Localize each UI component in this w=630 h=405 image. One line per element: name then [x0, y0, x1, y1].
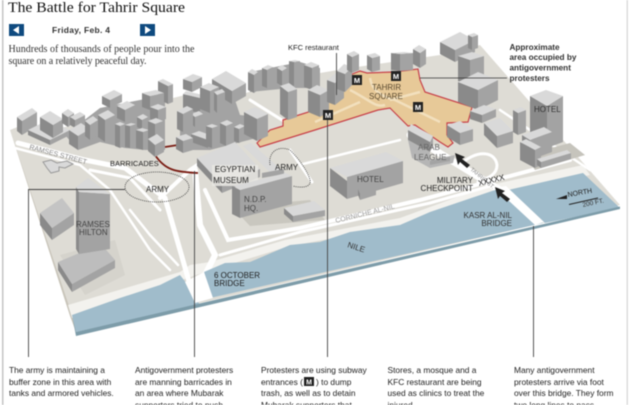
- Egyptian Museum: EGYPTIAN: [215, 165, 255, 174]
- intro text: Hundreds of thousands of people pour into the: [8, 44, 195, 55]
- hotel middle: [330, 152, 403, 200]
- subway markers: M: [415, 103, 421, 112]
- map labels: NILE: [346, 240, 366, 254]
- N.D.P. HQ: N.D.P.: [244, 195, 267, 204]
- caption 3: ) to dump: [316, 377, 352, 387]
- barricades line: [155, 145, 198, 173]
- map labels: CHECKPOINT: [421, 184, 473, 193]
- small block Ramses street: [43, 160, 73, 173]
- subway markers: M: [354, 76, 360, 85]
- ground: [10, 45, 620, 332]
- N.D.P. HQ: [232, 173, 325, 226]
- caption 3: M: [306, 380, 312, 386]
- river Nile: [72, 275, 200, 332]
- caption 2: Antigovernment protesters: [135, 365, 233, 375]
- arrows: [455, 153, 510, 202]
- white margin near river: [68, 165, 590, 318]
- Arab League: ARAB: [418, 143, 440, 152]
- caption 2: are manning barricades in: [135, 377, 232, 387]
- title: The Battle for Tahrir Square: [8, 0, 185, 16]
- callout: approximate area: area occupied by: [510, 53, 577, 62]
- caption 3: [261, 365, 367, 405]
- date navigation: [9, 24, 155, 36]
- map labels: MILITARY: [437, 176, 474, 185]
- leader lines: [28, 53, 534, 357]
- N.D.P. HQ: HQ.: [244, 204, 258, 213]
- subway markers: M: [393, 72, 399, 81]
- map labels: XXXXX: [477, 173, 506, 188]
- Ramses Hilton: RAMSES: [76, 220, 110, 229]
- intro text: square on a relatively peaceful day.: [8, 56, 146, 67]
- hotel middle: HOTEL: [357, 175, 384, 184]
- Arab League: LEAGUE: [414, 153, 446, 162]
- map labels: BRIDGE: [481, 219, 512, 228]
- north arrow and scale: [556, 188, 605, 209]
- caption 3: Protesters are using subway: [261, 365, 367, 375]
- caption 1: The army is maintaining a: [9, 365, 105, 375]
- caption 4: KFC restaurant are being: [388, 377, 482, 387]
- caption 4: used as clinics to treat the: [388, 388, 485, 398]
- map labels: BRIDGE: [214, 279, 245, 288]
- map labels: [28, 43, 513, 288]
- roads: [15, 100, 590, 285]
- caption 5: Many antigovernment: [514, 365, 595, 375]
- Ramses Hilton: [40, 178, 115, 292]
- army zone lower: ARMY: [146, 185, 170, 194]
- caption 3: entrances (: [261, 377, 303, 387]
- callout: approximate area: [420, 43, 577, 83]
- river front edge: [72, 206, 620, 336]
- map: [10, 32, 620, 336]
- Egyptian Museum: MUSEUM: [213, 176, 249, 185]
- map labels: TAHRIR ST.: [469, 167, 496, 191]
- date navigation: Friday, Feb. 4: [52, 25, 110, 35]
- subway markers: [323, 71, 423, 120]
- caption 2: an area where Mubarak: [135, 388, 224, 398]
- caption 4: Stores, a mosque and a: [388, 365, 477, 375]
- hotel right: HOTEL: [534, 105, 561, 114]
- army zone lower: [125, 172, 189, 202]
- callout: approximate area: Approximate: [510, 43, 560, 52]
- north arrow and scale: NORTH: [567, 188, 593, 199]
- army zone upper: ARMY: [275, 163, 299, 172]
- buildings far: [17, 32, 526, 157]
- caption 5: protesters arrive via foot: [514, 377, 605, 387]
- army zone upper: [270, 148, 310, 187]
- Egyptian Museum: [197, 142, 291, 193]
- map labels: 6 OCTOBER: [214, 271, 260, 280]
- map labels: BARRICADES: [110, 159, 159, 168]
- caption 5: over this bridge. They form: [514, 388, 613, 398]
- Arab League: [408, 124, 455, 168]
- subway markers: M: [325, 111, 331, 120]
- map labels: CORNICHE AL-NIL: [335, 203, 395, 225]
- caption 3: trash, as well as to detain: [261, 388, 356, 398]
- caption 1: tanks and armored vehicles.: [9, 388, 114, 398]
- map labels: SQUARE: [369, 92, 403, 101]
- callout: approximate area: antigovernment: [510, 64, 571, 72]
- caption 1: buffer zone in this area with: [9, 377, 112, 387]
- map labels: RAMSES STREET: [28, 144, 88, 166]
- bridges: [185, 272, 213, 303]
- map labels: KASR AL-NIL: [464, 211, 513, 220]
- map labels: TAHRIR: [372, 83, 401, 92]
- Ramses Hilton: HILTON: [79, 228, 108, 237]
- map labels: KFC restaurant: [288, 43, 340, 52]
- north arrow and scale: 200 FT.: [582, 198, 605, 209]
- hotel right: [520, 90, 585, 170]
- protest area Tahrir Square: [257, 69, 472, 147]
- callout: approximate area: protesters: [510, 74, 550, 83]
